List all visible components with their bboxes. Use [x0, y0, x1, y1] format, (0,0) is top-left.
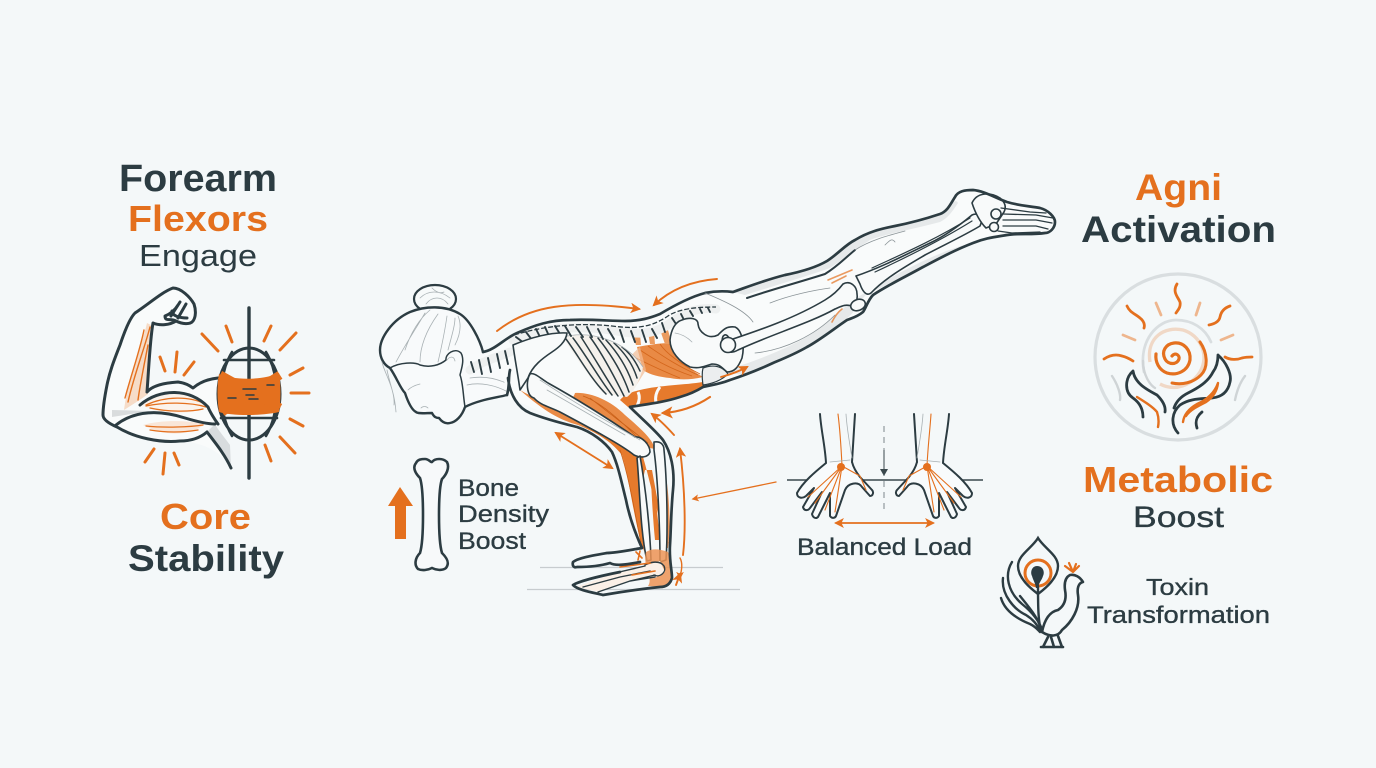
pelvis and hip bones	[670, 318, 743, 385]
icon: hands balanced load	[787, 414, 983, 523]
inner halo arc	[1143, 320, 1211, 372]
patella	[849, 297, 867, 313]
load arrowhead	[880, 469, 888, 476]
heading: metabolic boost: Boost	[1133, 501, 1225, 534]
core globe	[218, 308, 280, 478]
width arrow	[836, 522, 933, 524]
label: balanced load: Balanced Load	[797, 534, 972, 561]
inner thigh line and detail	[747, 250, 855, 298]
leg shading	[720, 201, 973, 375]
crest	[1065, 563, 1079, 572]
floor line	[787, 479, 983, 481]
label: bone density boost: Boost	[458, 528, 526, 555]
feather barbs	[1001, 562, 1042, 632]
fire spiral outer arc	[1172, 342, 1206, 384]
label: bone density boost	[458, 475, 549, 555]
sun rays	[1104, 284, 1252, 361]
up arrow	[388, 487, 413, 539]
heading: metabolic boost: Metabolic	[1083, 459, 1273, 500]
tibia and fibula	[856, 214, 981, 294]
feather eye	[1018, 538, 1058, 594]
heading: core stability	[128, 496, 284, 579]
outer ring	[1095, 274, 1261, 440]
femur	[722, 283, 857, 352]
grey side wisps	[1112, 361, 1245, 400]
glow spiral	[1149, 329, 1204, 387]
ground lines	[527, 568, 740, 590]
heading: forearm flexors engage: Flexors	[128, 198, 268, 239]
label: toxin transformation: Toxin	[1146, 574, 1209, 600]
upper arm and forearm bones	[527, 374, 667, 562]
label: toxin transformation	[1087, 574, 1270, 629]
heading: agni activation: Activation	[1081, 209, 1276, 250]
figure: arm balance pose anatomy	[380, 190, 1055, 595]
dark eye	[1031, 566, 1044, 588]
torso and leg silhouette	[483, 190, 1055, 420]
right hand	[896, 414, 972, 518]
centre axis	[883, 426, 885, 510]
icon: agni fire emblem	[1095, 274, 1261, 440]
callout arrow to hands	[693, 482, 776, 499]
motion arrows on body	[497, 279, 747, 585]
icon: peacock	[1001, 538, 1083, 647]
arm outline	[103, 288, 231, 468]
wrist and hand muscles	[645, 549, 672, 586]
icon: bone density up arrow	[388, 459, 448, 570]
arm fill and muscles	[103, 288, 231, 468]
fire spiral	[1156, 343, 1190, 374]
heading: forearm flexors engage	[119, 158, 277, 273]
foot bones	[972, 194, 1053, 233]
knee accents	[828, 270, 852, 322]
left hand	[797, 414, 873, 518]
arm muscles	[520, 390, 670, 553]
heading: core stability: Core	[160, 496, 251, 537]
rib cage	[563, 335, 643, 397]
leg detail lines	[705, 231, 905, 353]
femur head	[720, 338, 736, 352]
heading: agni activation: Agni	[1135, 167, 1222, 208]
icon: flexed arm with core globe	[103, 288, 309, 478]
leg outline	[483, 190, 1055, 407]
shoulder blade	[513, 333, 567, 390]
spine vertebrae	[470, 307, 716, 374]
cupped flame hands	[1127, 355, 1230, 433]
lumbar and abdominal muscles	[620, 330, 703, 407]
heading: core stability: Stability	[128, 538, 284, 579]
orange ring	[1025, 560, 1051, 586]
bone	[414, 459, 448, 570]
label: toxin transformation: Transformation	[1087, 602, 1270, 629]
heading: metabolic boost	[1083, 459, 1273, 534]
heading: forearm flexors engage: Forearm	[119, 158, 277, 200]
arm outline	[507, 370, 674, 595]
hand bones	[576, 551, 665, 592]
load arrow	[883, 450, 885, 474]
label: bone density boost: Density	[458, 501, 549, 528]
radiating energy lines	[145, 326, 309, 474]
label: bone density boost: Bone	[458, 475, 519, 502]
heading: forearm flexors engage: Engage	[139, 238, 257, 273]
head and bun	[380, 285, 520, 423]
peacock body	[1041, 575, 1083, 647]
heading: agni activation	[1081, 167, 1276, 250]
